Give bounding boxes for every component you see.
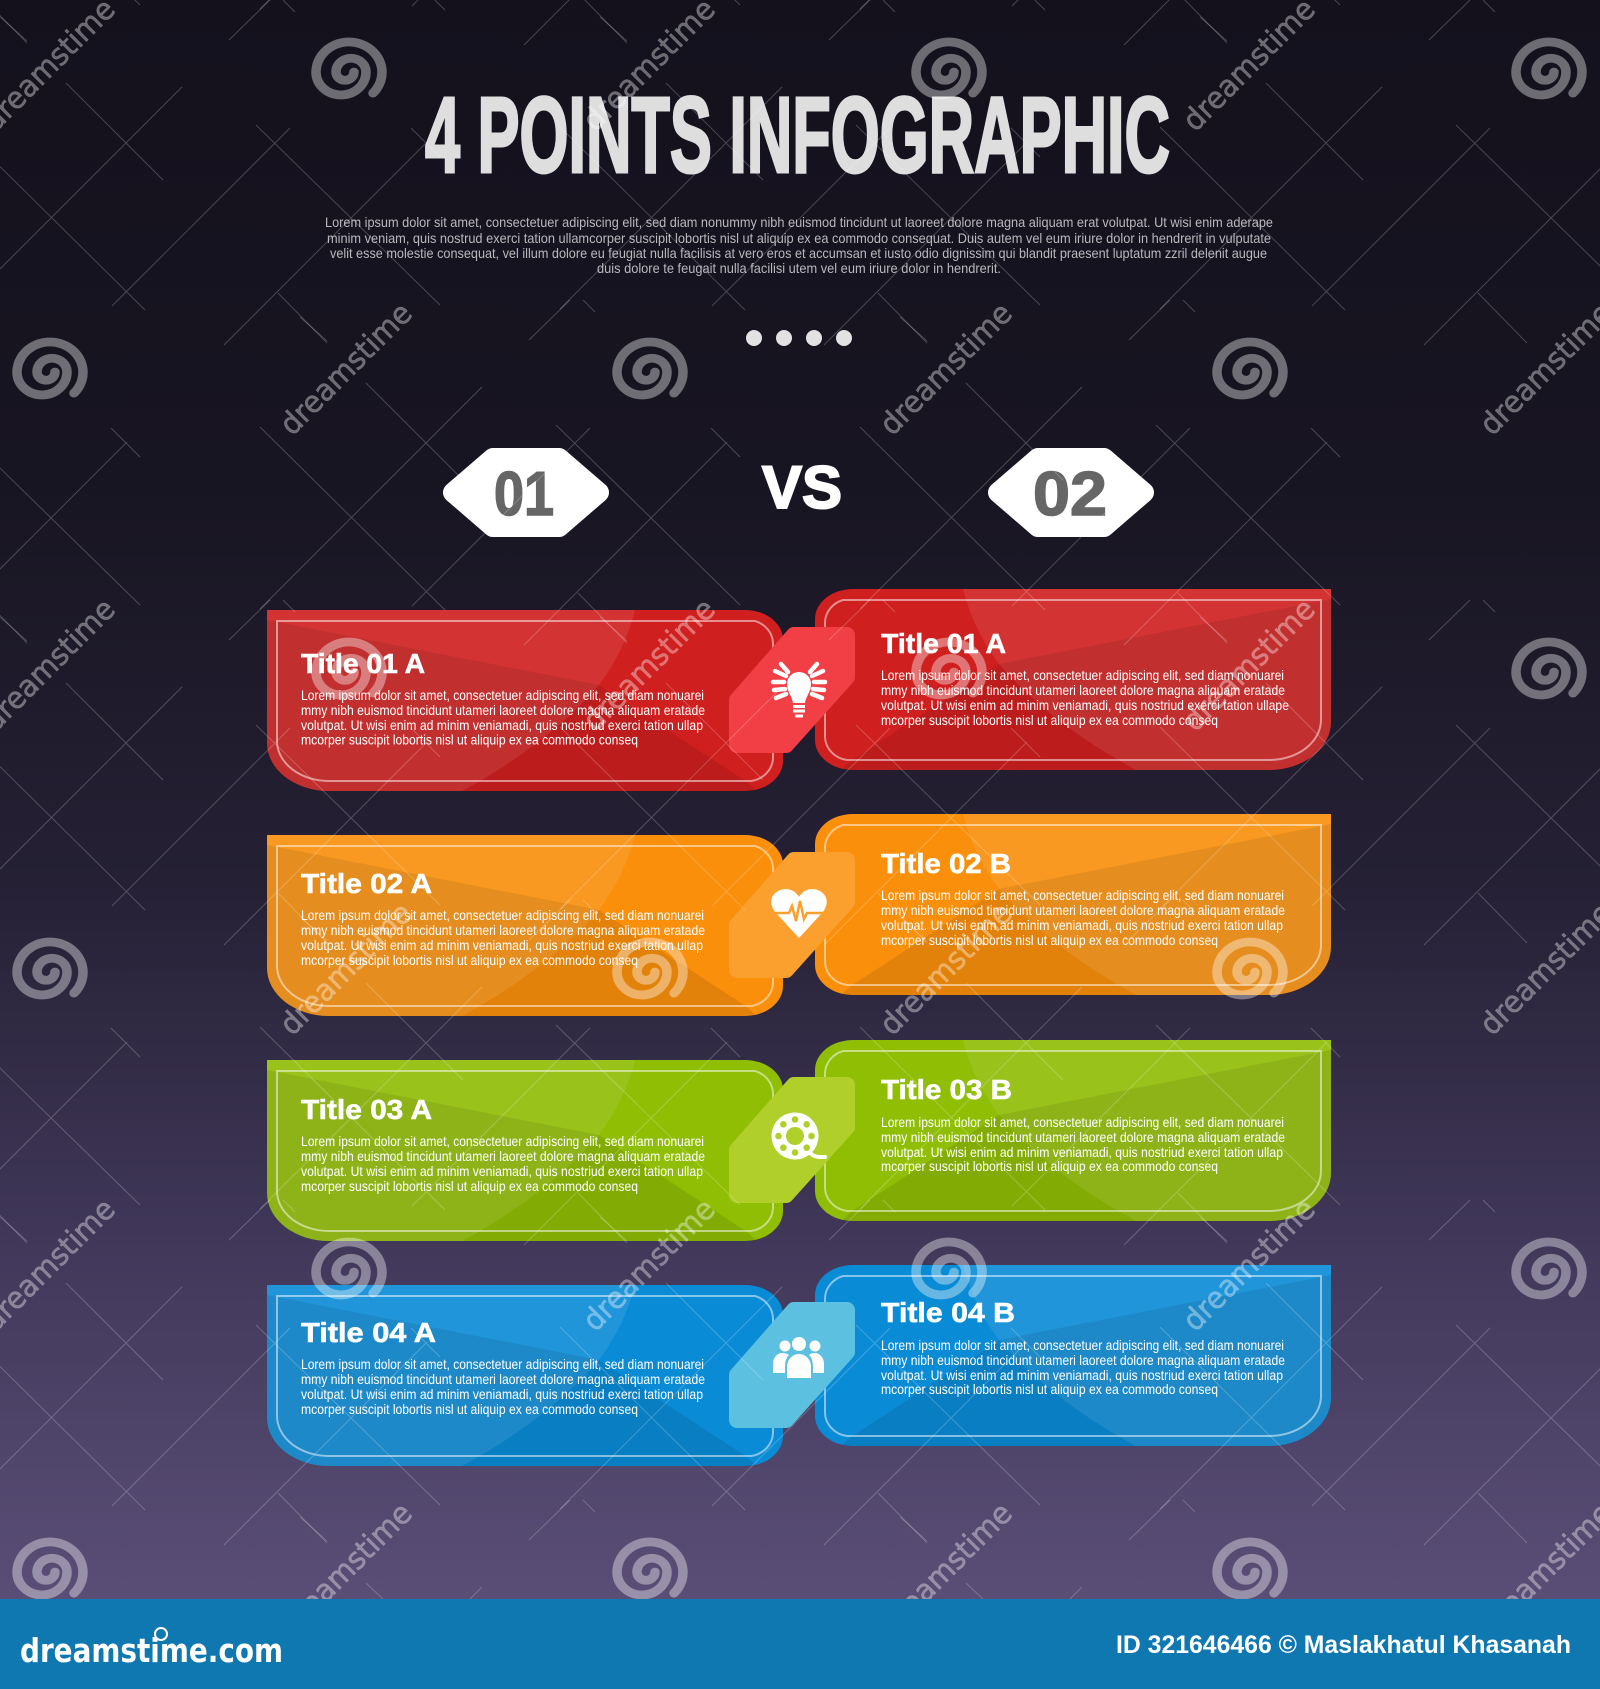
- card title: Title 01 A: [301, 648, 425, 679]
- card body: mcorper suscipit lobortis nisl ut aliquip ex ea commodo conseq: [301, 953, 638, 968]
- badge 01: [453, 458, 599, 529]
- icon: film reel: [772, 1112, 825, 1160]
- card body: [881, 1115, 1285, 1174]
- card 03 A: [267, 1060, 783, 1241]
- footer bar: [0, 1599, 1600, 1689]
- watermark overlay: dreamstime: [1176, 1192, 1322, 1338]
- watermark overlay: dreamstime: [273, 296, 419, 442]
- card body: volutpat. Ut wisi enim ad minim veniamadi, quis nostriud exerci tation ullape: [881, 698, 1289, 713]
- card body: mcorper suscipit lobortis nisl ut aliquip ex ea commodo conseq: [301, 1179, 638, 1194]
- four dots: [746, 330, 852, 346]
- card body: [881, 1338, 1285, 1397]
- card 02 B: [815, 814, 1331, 995]
- card body: Lorem ipsum dolor sit amet, consectetuer adipiscing elit, sed diam nonuarei: [301, 688, 704, 703]
- watermark overlay: dreamstime: [873, 896, 1019, 1042]
- card title: Title 04 A: [301, 1317, 436, 1348]
- footer credit: ID 321646466 © Maslakhatul Khasanah: [1116, 1631, 1571, 1659]
- icon: light bulb: [773, 664, 825, 716]
- card body: volutpat. Ut wisi enim ad minim veniamadi, quis nostriud exerci tation ullap: [301, 1387, 703, 1402]
- card body: volutpat. Ut wisi enim ad minim veniamadi, quis nostriud exerci tation ullap: [301, 938, 703, 953]
- footer logo: dreamstime.com: [20, 1631, 283, 1670]
- card 01 A: [267, 610, 783, 791]
- icon: heart with pulse: [771, 889, 827, 938]
- card body: mmy nibh euismod tincidunt utameri laoreet dolore magna aliquam eratade: [881, 903, 1285, 918]
- card body: volutpat. Ut wisi enim ad minim veniamadi, quis nostriud exerci tation ullap: [881, 1145, 1283, 1160]
- connector: red with bulb icon: [737, 635, 847, 745]
- watermark overlay: dreamstime: [576, 592, 722, 738]
- card body: Lorem ipsum dolor sit amet, consectetuer adipiscing elit, sed diam nonuarei: [301, 1357, 704, 1372]
- card body: [881, 668, 1289, 728]
- card body: mcorper suscipit lobortis nisl ut aliquip ex ea commodo conseq: [301, 1402, 638, 1417]
- intro text block: velit esse molestie consequat, vel illum dolore eu feugiat nulla facilisis at vero eros et accumsan et iusto odio dignissim qui blandit praesent luptatum zzril delenit augue: [330, 245, 1267, 261]
- intro text block: duis dolore te feugait nulla facilisi utem vel eum iriure dolor in hendrerit.: [597, 260, 1001, 276]
- card title: Title 03 B: [881, 1074, 1012, 1105]
- card body: volutpat. Ut wisi enim ad minim veniamadi, quis nostriud exerci tation ullap: [881, 1368, 1283, 1383]
- badge 01: 01: [494, 460, 554, 529]
- connector: green with reel icon: [737, 1085, 847, 1195]
- watermark overlay: dreamstime: [273, 896, 419, 1042]
- card 04 A: [267, 1285, 783, 1466]
- card body: mmy nibh euismod tincidunt utameri laoreet dolore magna aliquam eratade: [301, 1372, 705, 1387]
- card title: Title 02 A: [301, 868, 432, 899]
- card 02 A: [267, 835, 783, 1016]
- card body: [301, 1357, 705, 1417]
- card body: volutpat. Ut wisi enim ad minim veniamadi, quis nostriud exerci tation ullap: [881, 918, 1283, 933]
- watermark overlay: dreamstime: [1176, 592, 1322, 738]
- card body: mmy nibh euismod tincidunt utameri laoreet dolore magna aliquam eratade: [881, 1353, 1285, 1368]
- badge 02: [998, 458, 1144, 529]
- watermark overlay: dreamstime: [273, 1496, 419, 1642]
- card body: mcorper suscipit lobortis nisl ut aliquip ex ea commodo conseq: [881, 1382, 1218, 1397]
- card body: mcorper suscipit lobortis nisl ut aliquip ex ea commodo conseq: [881, 933, 1218, 948]
- card title: Title 03 A: [301, 1094, 432, 1125]
- card title: Title 04 B: [881, 1297, 1015, 1328]
- card body: Lorem ipsum dolor sit amet, consectetuer adipiscing elit, sed diam nonuarei: [881, 668, 1284, 683]
- card body: mmy nibh euismod tincidunt utameri laoreet dolore magna aliquam eratade: [301, 1149, 705, 1164]
- card body: Lorem ipsum dolor sit amet, consectetuer adipiscing elit, sed diam nonuarei: [301, 1134, 704, 1149]
- card body: Lorem ipsum dolor sit amet, consectetuer adipiscing elit, sed diam nonuarei: [881, 888, 1284, 903]
- intro text block: minim veniam, quis nostrud exerci tation ullamcorper suscipit lobortis nisl ut aliquip ex ea commodo consequat. Duis autem vel eum iriure dolor in hendrerit in vulputate: [327, 230, 1271, 246]
- icon: people group: [773, 1337, 824, 1378]
- card body: [301, 1134, 705, 1194]
- intro text block: Lorem ipsum dolor sit amet, consectetuer adipiscing elit, sed diam nonummy nibh euismod tincidunt ut laoreet dolore magna aliquam erat volutpat. Ut wisi enim aderape: [325, 214, 1273, 230]
- card body: volutpat. Ut wisi enim ad minim veniamadi, quis nostriud exerci tation ullap: [301, 1164, 703, 1179]
- card body: mcorper suscipit lobortis nisl ut aliquip ex ea commodo conseq: [881, 1159, 1218, 1174]
- card body: mcorper suscipit lobortis nisl ut aliquip ex ea commodo conseq: [301, 732, 638, 748]
- connector: orange with heart icon: [737, 860, 847, 970]
- card body: mmy nibh euismod tincidunt utameri laoreet dolore magna aliquam eratade: [301, 703, 705, 718]
- badge 02: 02: [1033, 460, 1107, 529]
- card title: Title 02 B: [881, 848, 1011, 879]
- card 04 B: [815, 1265, 1331, 1446]
- card body: mcorper suscipit lobortis nisl ut aliquip ex ea commodo conseq: [881, 713, 1218, 728]
- watermark overlay: dreamstime: [873, 1496, 1019, 1642]
- watermark overlay: dreamstime: [873, 296, 1019, 442]
- card 01 B: [815, 589, 1331, 770]
- card 03 B: [815, 1040, 1331, 1221]
- card body: [881, 888, 1285, 948]
- watermark overlay: dreamstime: [576, 1192, 722, 1338]
- connector: blue with people icon: [737, 1310, 847, 1420]
- VS label: VS: [762, 454, 842, 521]
- intro text block: [325, 214, 1273, 276]
- card body: [301, 908, 705, 968]
- card body: volutpat. Ut wisi enim ad minim veniamadi, quis nostriud exerci tation ullap: [301, 718, 703, 733]
- card title: Title 01 A: [881, 628, 1006, 659]
- card body: Lorem ipsum dolor sit amet, consectetuer adipiscing elit, sed diam nonuarei: [881, 1115, 1284, 1130]
- card body: Lorem ipsum dolor sit amet, consectetuer adipiscing elit, sed diam nonuarei: [881, 1338, 1284, 1353]
- card body: [301, 688, 705, 748]
- card body: mmy nibh euismod tincidunt utameri laoreet dolore magna aliquam eratade: [881, 683, 1285, 698]
- card body: mmy nibh euismod tincidunt utameri laoreet dolore magna aliquam eratade: [301, 923, 705, 938]
- card body: Lorem ipsum dolor sit amet, consectetuer adipiscing elit, sed diam nonuarei: [301, 908, 704, 923]
- card body: mmy nibh euismod tincidunt utameri laoreet dolore magna aliquam eratade: [881, 1130, 1285, 1145]
